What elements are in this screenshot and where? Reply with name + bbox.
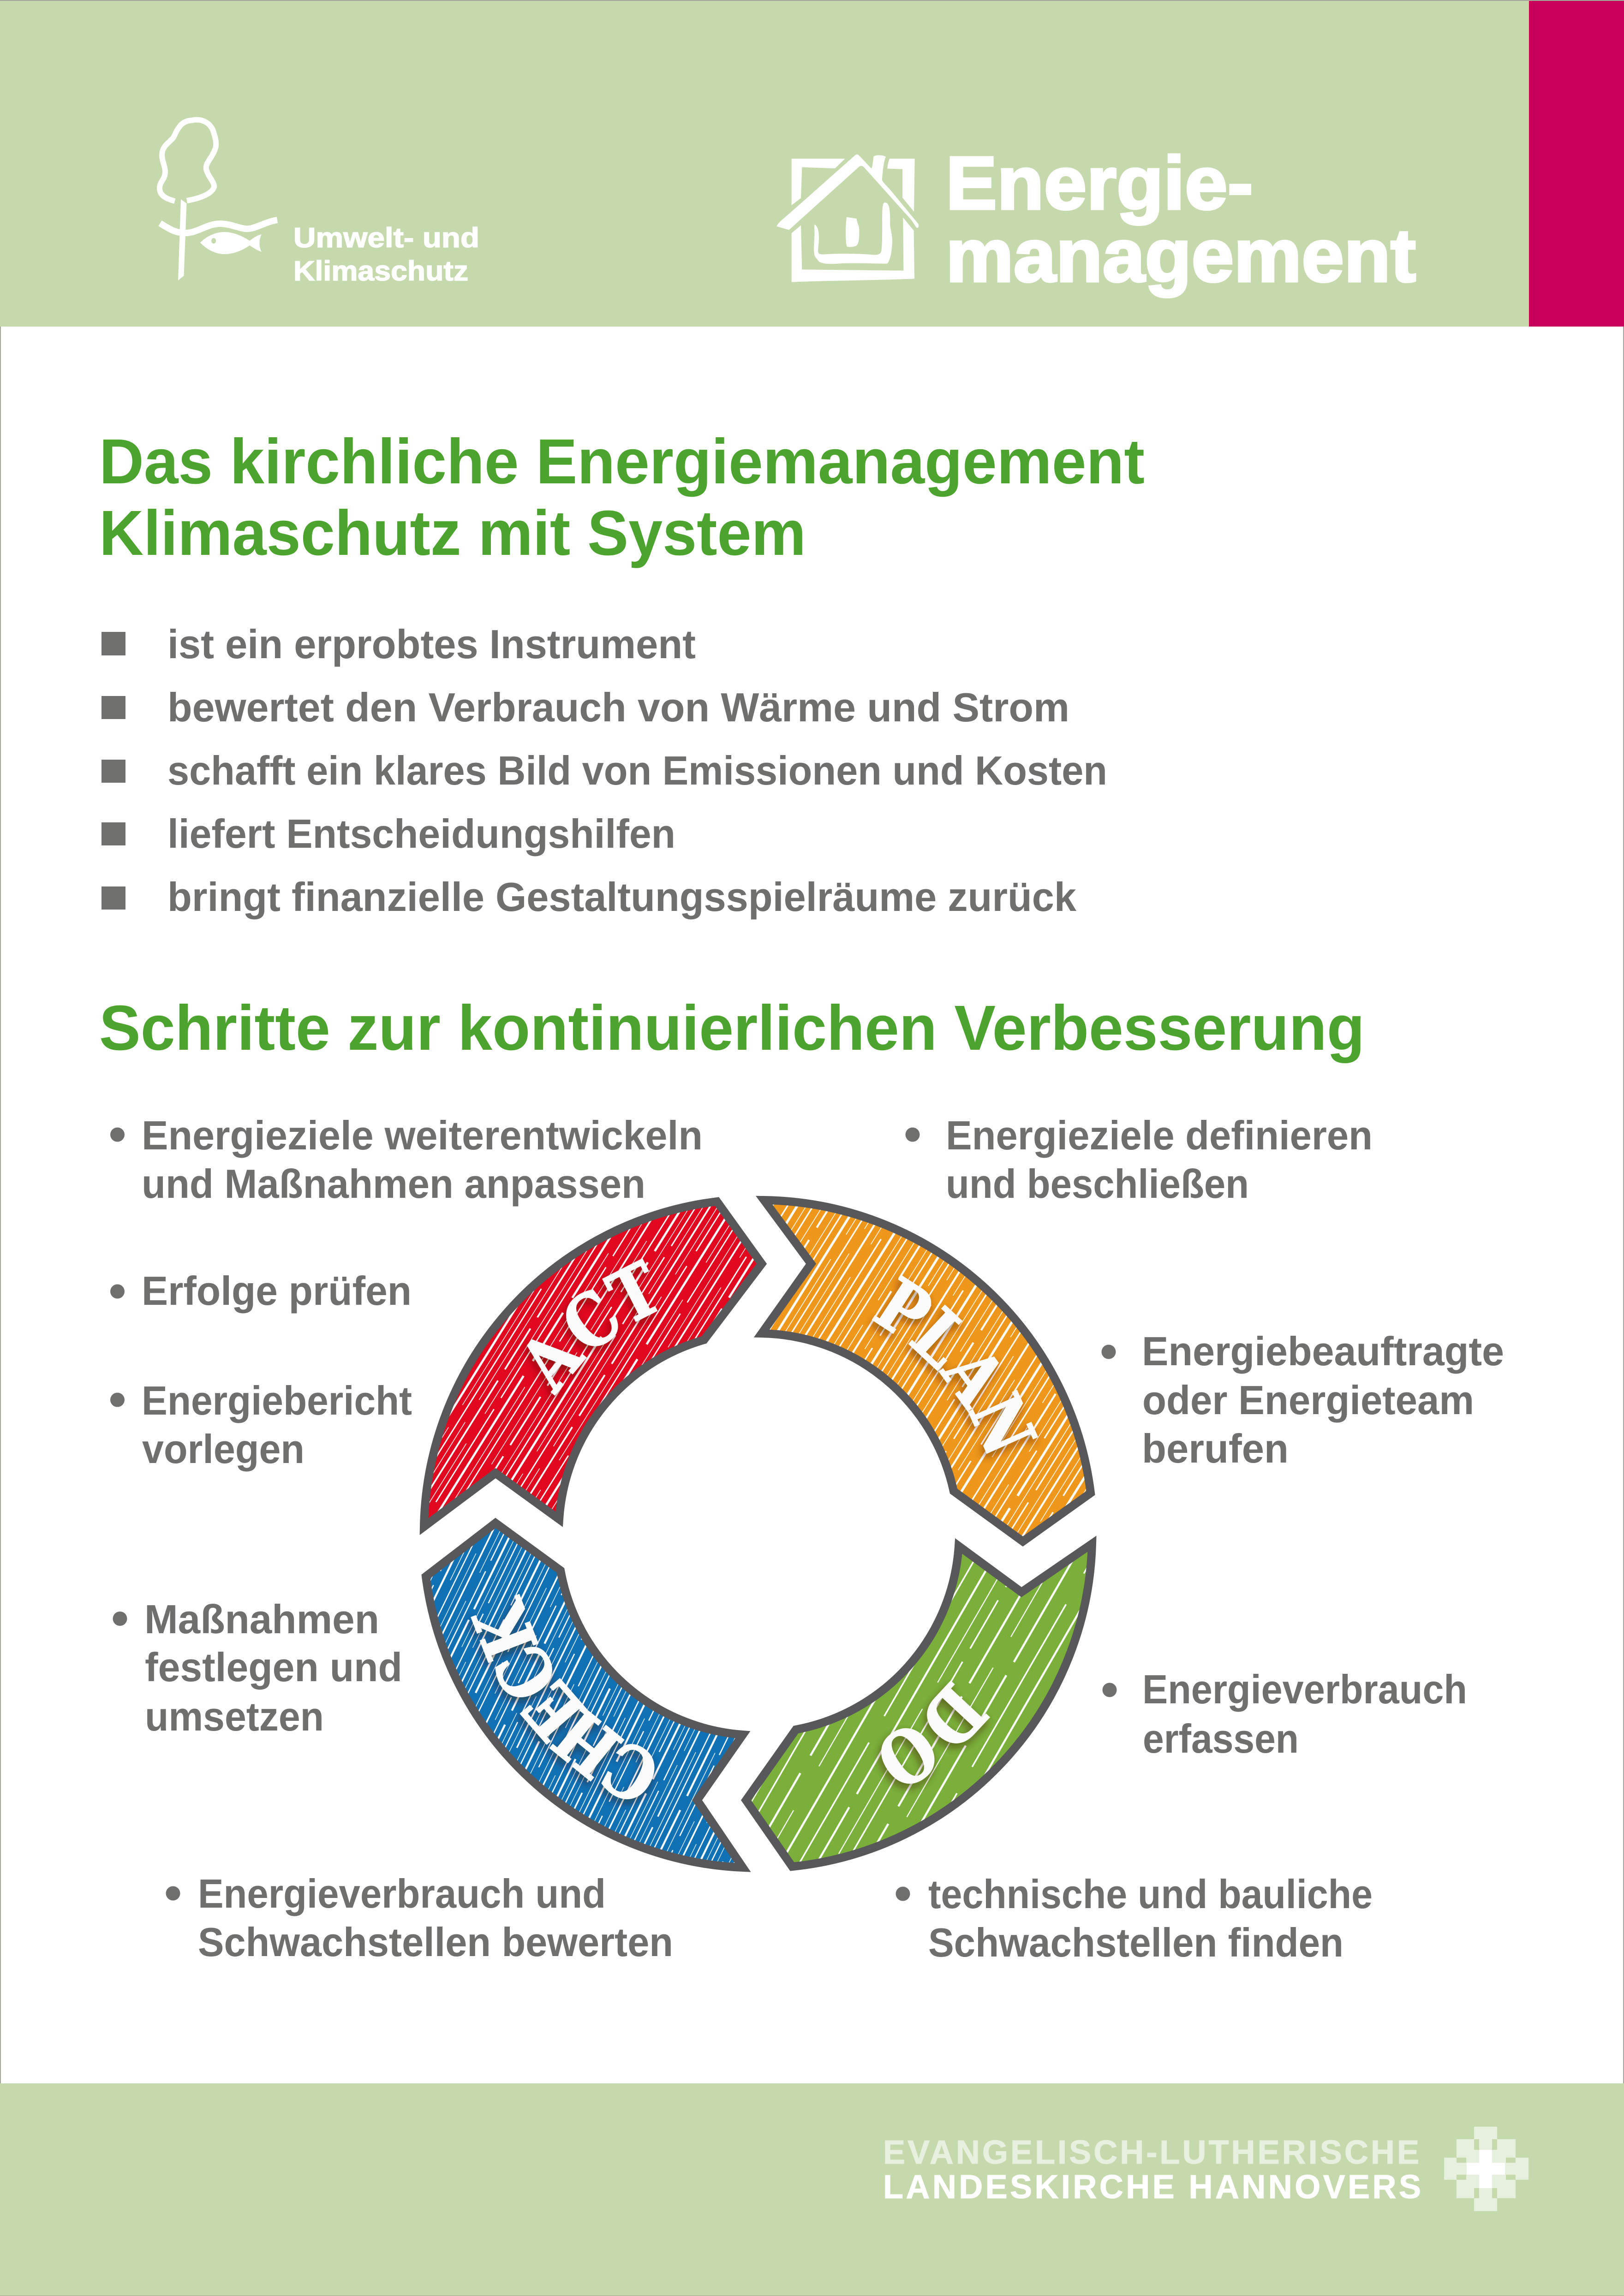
segment: PLAN (762, 1200, 1091, 1541)
logo text: Umwelt- und (293, 222, 479, 253)
label: Erfolge prüfen: Erfolge prüfen (142, 1268, 412, 1314)
benefits list: bringt finanzielle Gestaltungsspielräume zurück (167, 874, 1077, 920)
segment: ACT: T (596, 1246, 675, 1342)
tree trunk (178, 199, 186, 280)
fish (200, 232, 262, 254)
segment: ACT: C (547, 1273, 637, 1369)
segment: CHECK (426, 1523, 743, 1868)
label: Energieziele weiterentwickeln (110, 1112, 703, 1207)
logo text (293, 222, 479, 286)
heading: Schritte: Schritte zur kontinuierlichen Verbesserung (99, 993, 1365, 1064)
label: technische und bauliche Schwachstellen finden: technische und bauliche (928, 1871, 1373, 1917)
icon: church cross (1444, 2127, 1528, 2211)
benefits list: liefert Entscheidungshilfen (167, 811, 675, 857)
magenta corner stripe (1529, 0, 1624, 327)
label: Energiebeauftragte: oder Energieteam (1142, 1377, 1474, 1423)
segment: DO: D (904, 1667, 1002, 1764)
label: Energieverbrauch und Schwachstellen bewerten: Schwachstellen bewerten (198, 1919, 673, 1965)
label: Energieziele definieren: und beschließen (946, 1161, 1249, 1207)
segment: CHECK: K (456, 1588, 555, 1670)
label: Energiebericht vorlegen (110, 1378, 412, 1472)
label: Maßnahmen festlegen und umsetzen: Maßnahmen (144, 1596, 379, 1642)
label: Energieverbrauch und Schwachstellen bewerten: Energieverbrauch und (198, 1871, 606, 1916)
title: Energiemanagement (946, 141, 1416, 297)
benefits list: bewertet den Verbrauch von Wärme und Strom (167, 684, 1069, 730)
footer text: EVANGELISCH-LUTHERISCHE (883, 2134, 1419, 2171)
label: Energiebericht vorlegen: Energiebericht (142, 1378, 412, 1423)
benefits list (102, 621, 1107, 920)
benefits list: ist ein erprobtes Instrument (167, 621, 696, 667)
label: Energiebeauftragte (1102, 1328, 1504, 1471)
icon: house (776, 155, 919, 282)
segment: PLAN: N (952, 1382, 1052, 1468)
segment: CHECK: E (507, 1665, 602, 1756)
label: Energiebeauftragte: Energiebeauftragte (1142, 1328, 1504, 1374)
title: Energiemanagement: Energie- (946, 141, 1253, 225)
label: Energieziele definieren: Energieziele definieren (946, 1112, 1373, 1158)
heading: Das kirchliche Energiemanagement: Klimaschutz mit System (99, 498, 806, 569)
segment: CHECK: C (478, 1630, 576, 1715)
label: Energieziele weiterentwickeln: Energieziele weiterentwickeln (142, 1112, 703, 1158)
segment: CHECK: H (539, 1692, 637, 1794)
label: technische und bauliche Schwachstellen finden (896, 1871, 1373, 1965)
segment: DO: O (861, 1705, 953, 1805)
PDCA cycle (424, 1200, 1092, 1868)
segment: CHECK: C (590, 1723, 672, 1820)
label: Energieziele weiterentwickeln: und Maßnahmen anpassen (142, 1161, 645, 1207)
logo: tree and fish (160, 120, 277, 280)
tree crown outline (160, 120, 216, 201)
label: Energieverbrauch erfassen: erfassen (1143, 1716, 1299, 1761)
header band (0, 0, 1624, 327)
label: Maßnahmen festlegen und umsetzen: umsetzen (145, 1694, 324, 1739)
label: Energiebeauftragte: berufen (1142, 1426, 1289, 1471)
label: Energieziele definieren (905, 1112, 1373, 1207)
title: Energiemanagement: management (946, 213, 1416, 297)
logo text: Klimaschutz (293, 256, 468, 286)
label: technische und bauliche Schwachstellen finden: Schwachstellen finden (928, 1920, 1343, 1965)
label: Energieverbrauch erfassen: Energieverbrauch (1142, 1666, 1467, 1712)
label: Maßnahmen festlegen und umsetzen (113, 1596, 402, 1739)
wave (160, 220, 277, 233)
segment: ACT (424, 1202, 762, 1527)
footer text (883, 2134, 1421, 2206)
label: Energieverbrauch und Schwachstellen bewerten (166, 1871, 673, 1965)
label: Energieverbrauch erfassen (1103, 1666, 1467, 1761)
benefits list: schafft ein klares Bild von Emissionen und Kosten (167, 748, 1107, 793)
segment: PLAN: L (895, 1293, 984, 1384)
footer text: LANDESKIRCHE HANNOVERS (883, 2169, 1421, 2206)
label: Energiebericht vorlegen: vorlegen (142, 1426, 304, 1472)
segment: ACT: A (503, 1315, 599, 1406)
segment: PLAN: P (861, 1262, 945, 1358)
segment: DO (746, 1544, 1092, 1867)
footer band (0, 2083, 1624, 2296)
label: Maßnahmen festlegen und umsetzen: festlegen und (145, 1644, 402, 1690)
heading: Das kirchliche Energiemanagement: Das kirchliche Energiemanagement (99, 426, 1145, 497)
heading: Das kirchliche Energiemanagement (99, 426, 1145, 569)
segment: PLAN: A (925, 1332, 1022, 1421)
